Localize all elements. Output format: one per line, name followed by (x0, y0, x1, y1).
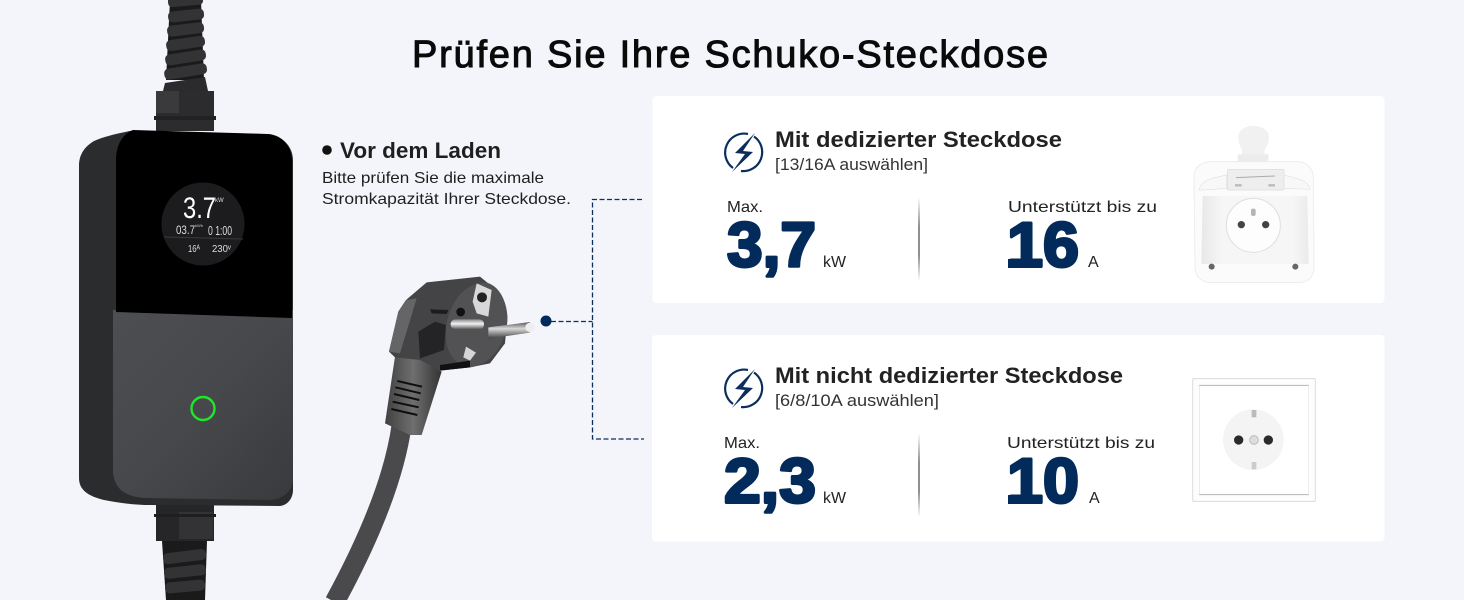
current label: Unterstützt bis zu (1007, 435, 1155, 452)
round display: kWh (195, 223, 203, 228)
max label: Max. (727, 199, 763, 216)
charger device illustration (79, 0, 293, 600)
current label: Unterstützt bis zu (1008, 199, 1157, 216)
icon: lightning circle (725, 133, 762, 172)
before charging note (322, 138, 571, 208)
device front lower face (113, 310, 293, 500)
icon: lightning circle (725, 369, 762, 408)
round display: 230ᵛ (212, 244, 232, 255)
round display: 0 1:00 (208, 223, 232, 238)
note text (322, 170, 571, 208)
connector dot (540, 316, 552, 326)
cable (335, 425, 402, 600)
title: Prüfen Sie Ihre Schuko-Steckdose (412, 34, 1048, 76)
divider (918, 197, 920, 281)
bottom cable gland and cable (154, 503, 216, 600)
note text: Bitte prüfen Sie die maximale (322, 170, 544, 187)
plug body (389, 277, 507, 371)
panel: non-dedicated socket (652, 335, 1384, 542)
socket photo: outdoor socket (1194, 126, 1314, 283)
device body side (79, 131, 293, 506)
strain relief (385, 357, 442, 435)
current value: 16 (1007, 210, 1079, 280)
round display: 03.7 (176, 223, 195, 237)
plug and cable (335, 277, 535, 600)
note bullet (322, 145, 332, 155)
note heading: Vor dem Laden (340, 138, 501, 163)
note text: Stromkapazität Ihrer Steckdose. (322, 191, 571, 208)
power value: 3,7 (727, 210, 816, 280)
panel heading: Mit nicht dedizierter Steckdose (775, 363, 1123, 388)
round display (162, 182, 244, 266)
panel subheading: [13/16A auswählen] (775, 155, 928, 174)
power unit: kW (823, 490, 847, 507)
divider (918, 433, 920, 517)
panel subheading: [6/8/10A auswählen] (775, 391, 939, 410)
round display: kW (215, 198, 224, 204)
round display: 16ᴬ (188, 244, 200, 255)
display power reading: 3.7 (183, 192, 216, 225)
power value: 2,3 (724, 446, 816, 516)
panel: dedicated socket (652, 96, 1384, 303)
current value: 10 (1007, 446, 1079, 516)
connector lines (551, 200, 644, 439)
current unit: A (1088, 254, 1099, 271)
device black screen panel (116, 130, 292, 318)
panel heading: Mit dedizierter Steckdose (775, 127, 1062, 152)
green status LED (192, 397, 214, 420)
top cable gland (154, 91, 216, 131)
max label: Max. (724, 435, 760, 452)
power unit: kW (823, 254, 847, 271)
top corrugated cable (163, 0, 208, 91)
current unit: A (1089, 490, 1100, 507)
socket photo: wall socket (1193, 379, 1315, 501)
